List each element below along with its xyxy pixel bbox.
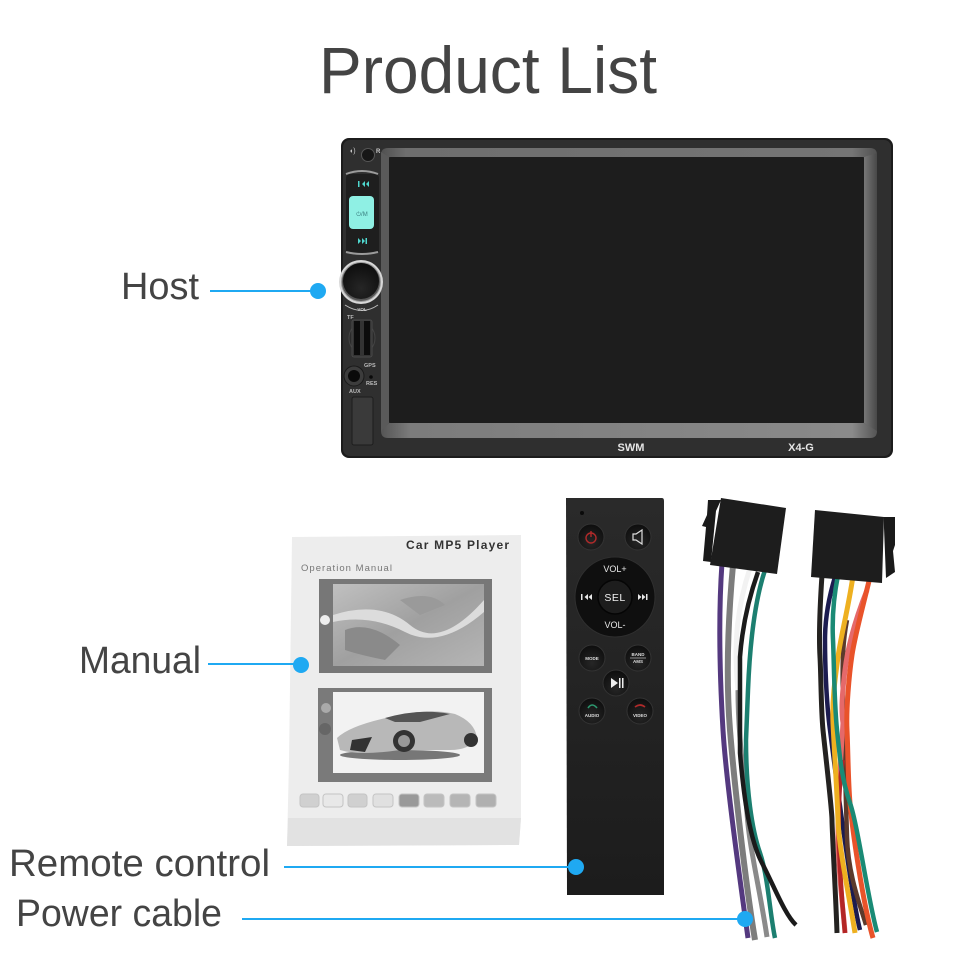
manual picture: world map [319,579,492,673]
USB cover [352,397,373,445]
card slots [349,320,375,357]
AUX label: AUX [349,389,361,395]
manual heading: Car MP5 Player [406,538,509,552]
screen bezel [381,148,877,438]
label: host: Host [121,266,199,308]
manual picture: sports car [318,688,492,782]
mode button [579,645,605,671]
callout: manual [208,657,309,673]
GPS label: GPS [364,363,376,369]
AUX jack [344,366,364,386]
brand SWM: SWM [618,442,644,454]
video button [627,698,653,724]
title: Product List [319,33,657,107]
direction ring: VOL+ [603,564,627,574]
model X4-G: X4-G [788,442,814,454]
callout: host [210,283,326,299]
volume knob [339,260,383,304]
manual bottom band [287,818,521,846]
power cable: left harness [720,563,796,940]
left connector [702,498,786,574]
band button: AMS [633,659,643,664]
upper curved trim [346,171,378,174]
label: power cable: Power cable [16,893,222,935]
screen [389,157,864,423]
TF label: TF [347,315,354,321]
manual [287,535,521,846]
callout: power cable [242,911,753,927]
direction ring: VOL- [604,620,626,630]
label R: R [376,149,381,155]
previous icon [358,181,369,187]
volume arc label: VOL [357,307,367,312]
direction ring: SEL [604,592,626,604]
remote control [566,498,664,895]
band button [625,645,651,671]
power cable: right harness [819,575,877,938]
callout: remote control [284,859,584,875]
manual subheading: Operation Manual [301,563,392,574]
play button [603,670,629,696]
IR dot [580,511,584,515]
host unit [339,138,893,458]
mode button: MODE [585,656,599,661]
power/mode button [349,196,374,229]
video button: VIDEO [633,713,647,718]
speaker icon: ◖) [349,148,356,155]
volume arc label [345,305,378,312]
power/mode button: ⏻/M [356,211,368,218]
label: remote control: Remote control [9,843,270,885]
mic jack [362,148,374,162]
mute button [625,524,651,550]
label: manual: Manual [79,640,201,682]
reset hole [369,375,373,379]
lower curved trim [346,252,378,254]
right connector [811,510,895,583]
direction ring [575,557,655,637]
audio button [579,698,605,724]
power button [578,524,604,550]
audio button: AUDIO [585,713,600,718]
manual feature icons [300,794,496,807]
RES label: RES [366,381,378,387]
next icon [358,238,367,244]
band button: BAND [632,652,645,657]
button panel [346,174,379,254]
